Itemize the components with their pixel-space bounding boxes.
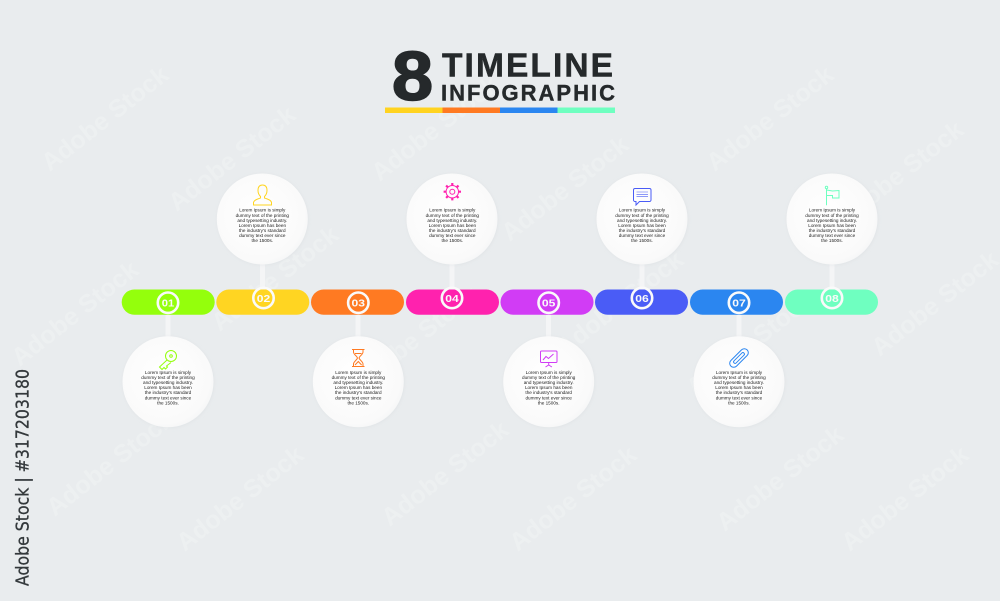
icon: key bbox=[160, 350, 176, 370]
body text: Lorem Ipsum is simply bbox=[145, 370, 192, 375]
body text: and typesetting industry. bbox=[237, 218, 287, 223]
body text: the 1500s. bbox=[441, 238, 463, 243]
body text: the industry's standard bbox=[809, 228, 856, 233]
body text: the industry's standard bbox=[335, 390, 382, 395]
text: Adobe Stock bbox=[831, 116, 969, 232]
number labels: 01 bbox=[162, 298, 174, 310]
body text: dummy text of the printing bbox=[805, 213, 859, 218]
icon: person bbox=[254, 185, 272, 205]
text: Adobe Stock bbox=[711, 421, 849, 537]
body text: Lorem Ipsum is simply bbox=[429, 208, 476, 213]
body text bbox=[615, 208, 669, 243]
number labels: 07 bbox=[732, 298, 746, 310]
body text: and typesetting industry. bbox=[524, 380, 574, 385]
title colour bar bbox=[385, 108, 615, 113]
text: Adobe Stock bbox=[504, 441, 642, 557]
body text: the industry's standard bbox=[619, 228, 666, 233]
body text: Lorem Ipsum has been bbox=[618, 223, 666, 228]
body text: Lorem Ipsum is simply bbox=[716, 370, 763, 375]
connector stems bbox=[166, 260, 834, 342]
body text: dummy text ever since bbox=[239, 233, 286, 238]
panel: step 05 bbox=[503, 336, 594, 427]
body text: and typesetting industry. bbox=[617, 218, 667, 223]
text: Adobe Stock bbox=[701, 61, 839, 177]
body text bbox=[712, 370, 766, 405]
panel: step 02 bbox=[217, 174, 308, 264]
number labels: 04 bbox=[445, 293, 459, 305]
text: Adobe Stock bbox=[866, 246, 1000, 362]
panel: step 03 bbox=[313, 336, 404, 427]
text: Adobe Stock bbox=[366, 71, 504, 187]
title line: INFOGRAPHIC: INFOGRAPHIC bbox=[441, 80, 615, 106]
body text: Lorem Ipsum is simply bbox=[335, 370, 382, 375]
text: Adobe Stock bbox=[346, 281, 484, 397]
text: Adobe Stock bbox=[6, 256, 144, 372]
body text: the industry's standard bbox=[525, 390, 572, 395]
body text: dummy text of the printing bbox=[522, 375, 576, 380]
body text: Lorem Ipsum has been bbox=[144, 385, 192, 390]
body text bbox=[805, 208, 859, 243]
body text: dummy text ever since bbox=[335, 395, 382, 400]
text: Adobe Stock bbox=[171, 441, 309, 557]
body text: the 1500s. bbox=[347, 400, 369, 405]
body text: dummy text of the printing bbox=[426, 213, 479, 218]
icon: flag bbox=[825, 186, 839, 205]
body text: the 1500s. bbox=[251, 238, 273, 243]
text: Adobe Stock bbox=[41, 406, 179, 522]
icon: paperclip link bbox=[728, 347, 750, 369]
body text bbox=[426, 208, 479, 243]
body text: dummy text of the printing bbox=[615, 213, 669, 218]
number labels: 06 bbox=[635, 293, 649, 305]
body text: the 1500s. bbox=[631, 238, 653, 243]
body text: Lorem Ipsum has been bbox=[429, 223, 476, 228]
body text: dummy text ever since bbox=[619, 233, 666, 238]
body text: dummy text ever since bbox=[429, 233, 476, 238]
body text: dummy text ever since bbox=[716, 395, 763, 400]
body text: Lorem Ipsum has been bbox=[525, 385, 573, 390]
body text: Lorem Ipsum has been bbox=[335, 385, 382, 390]
title bbox=[385, 38, 615, 116]
number labels: 05 bbox=[542, 298, 556, 310]
body text: the industry's standard bbox=[239, 228, 286, 233]
text: Adobe Stock bbox=[206, 221, 344, 337]
title line: TIMELINE: TIMELINE bbox=[442, 48, 613, 84]
stock id side label: Adobe Stock | #317203180 bbox=[12, 369, 34, 586]
text: Adobe Stock bbox=[163, 101, 301, 217]
body text: Lorem Ipsum is simply bbox=[239, 208, 286, 213]
body text bbox=[522, 370, 576, 405]
body text: and typesetting industry. bbox=[427, 218, 477, 223]
timeline pills bbox=[122, 290, 878, 315]
number labels: 08 bbox=[825, 293, 839, 305]
text: Adobe Stock bbox=[376, 416, 514, 532]
number labels bbox=[162, 293, 839, 310]
body text: the industry's standard bbox=[145, 390, 192, 395]
body text bbox=[332, 370, 385, 405]
body text: Lorem Ipsum has been bbox=[239, 223, 286, 228]
number labels: 02 bbox=[257, 293, 270, 305]
body text: dummy text ever since bbox=[525, 395, 572, 400]
text: Adobe Stock bbox=[836, 441, 974, 557]
body text: Lorem Ipsum is simply bbox=[526, 370, 572, 375]
body text: dummy text ever since bbox=[809, 233, 856, 238]
panel: step 07 bbox=[694, 336, 784, 427]
body text: Lorem Ipsum has been bbox=[808, 223, 856, 228]
text: Adobe Stock bbox=[551, 246, 689, 362]
body text: and typesetting industry. bbox=[807, 218, 857, 223]
body text: Lorem Ipsum is simply bbox=[809, 208, 856, 213]
title numeral 8: 8 bbox=[392, 38, 433, 116]
body text: Lorem Ipsum has been bbox=[715, 385, 763, 390]
body text: the industry's standard bbox=[429, 228, 476, 233]
body text: and typesetting industry. bbox=[714, 380, 764, 385]
icon: hourglass bbox=[352, 350, 364, 366]
body text: dummy text of the printing bbox=[236, 213, 289, 218]
body text: dummy text ever since bbox=[145, 395, 192, 400]
body text: and typesetting industry. bbox=[143, 380, 193, 385]
icon: speech bubble bbox=[634, 188, 651, 205]
panel: step 04 bbox=[406, 174, 498, 264]
body text bbox=[236, 208, 289, 243]
body text: the 1500s. bbox=[821, 238, 843, 243]
body text: Lorem Ipsum is simply bbox=[619, 208, 666, 213]
body text: the 1500s. bbox=[157, 400, 179, 405]
body text bbox=[141, 370, 195, 405]
body text: dummy text of the printing bbox=[141, 375, 195, 380]
body text: and typesetting industry. bbox=[333, 380, 383, 385]
body text: the industry's standard bbox=[716, 390, 763, 395]
icon: gear bbox=[444, 183, 461, 200]
text: Adobe Stock bbox=[681, 286, 819, 402]
panel: step 01 bbox=[122, 336, 214, 427]
number badges bbox=[158, 288, 842, 313]
body text: the 1500s. bbox=[728, 400, 750, 405]
number labels: 03 bbox=[352, 298, 365, 310]
text: Adobe Stock bbox=[496, 131, 634, 247]
panel: step 06 bbox=[596, 174, 688, 264]
icon: presentation chart bbox=[540, 351, 557, 367]
body text: dummy text of the printing bbox=[332, 375, 385, 380]
text: Adobe Stock bbox=[36, 61, 174, 177]
panel: step 08 bbox=[786, 174, 878, 264]
body text: the 1500s. bbox=[538, 400, 560, 405]
body text: dummy text of the printing bbox=[712, 375, 766, 380]
